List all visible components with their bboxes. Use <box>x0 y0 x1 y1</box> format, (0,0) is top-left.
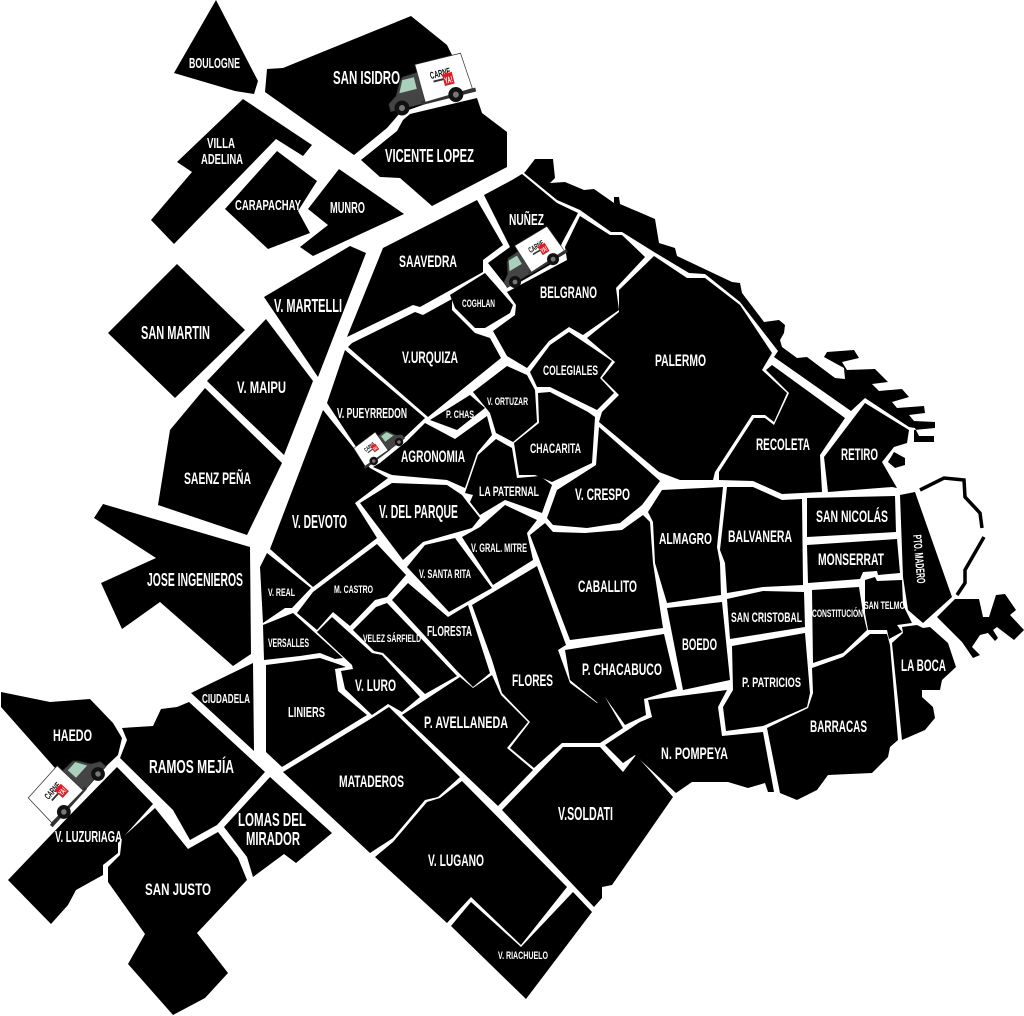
barrio: Nuñez: NUÑEZ <box>509 209 544 229</box>
barrio: N. Pompeya: N. POMPEYA <box>661 744 728 763</box>
barrio: Velez Sarsfield: VELEZ SÁRFIELD <box>363 632 421 645</box>
barrio: Floresta: FLORESTA <box>427 623 472 640</box>
icon: delivery truck Haedo <box>25 742 111 831</box>
barrio: Coghlan <box>450 273 513 328</box>
river outline <box>920 478 984 595</box>
barrio: Almagro <box>648 487 723 603</box>
barrio: V. Devoto <box>270 410 388 587</box>
barrio: V. Devoto: V. DEVOTO <box>292 512 347 532</box>
Retiro island <box>888 452 905 468</box>
barrio: Boulogne: BOULOGNE <box>189 55 240 72</box>
barrio: V. Santa Rita <box>407 538 492 612</box>
barrio: Recoleta: RECOLETA <box>756 435 810 454</box>
barrio: Liniers <box>266 658 367 767</box>
barrio: V. Pueyrredon: V. PUEYRREDON <box>337 405 407 422</box>
barrio: V. Crespo <box>547 427 660 528</box>
barrio: Velez Sarsfield <box>353 603 457 694</box>
barrio: San Isidro: SAN ISIDRO <box>333 68 400 88</box>
barrio: La Paternal <box>465 439 552 515</box>
barrio: Caballito <box>530 515 663 640</box>
barrio: Retiro: RETIRO <box>841 445 878 464</box>
barrio: P. Chacabuco: P. CHACABUCO <box>582 660 662 679</box>
barrio: V. Lugano <box>375 781 567 945</box>
barrio: Ciudadela <box>191 663 254 751</box>
barrio: Recoleta <box>719 365 845 494</box>
barrio: Villa Adelina: ADELINA <box>201 151 243 168</box>
barrio: Lomas del Mirador: LOMAS DEL <box>238 810 306 830</box>
barrio: Agronomia <box>373 416 492 488</box>
barrio: Caballito: CABALLITO <box>578 577 637 596</box>
barrio: P. Patricios: P. PATRICIOS <box>742 674 801 690</box>
barrio: Coghlan: COGHLAN <box>462 298 495 310</box>
barrio: San Cristobal: SAN CRISTOBAL <box>731 609 802 625</box>
barrio: Mataderos <box>283 707 460 853</box>
icon: delivery truck Nuñez: CARNE <box>527 238 546 255</box>
barrio: Floresta <box>392 583 490 687</box>
barrio: V. Gral. Mitre <box>462 505 537 585</box>
barrio: M. Castro <box>297 544 406 630</box>
barrio: Saenz Peña: SAENZ PEÑA <box>184 468 251 488</box>
barrio: Nuñez <box>484 174 578 287</box>
barrio: V. Luzuriaga: V. LUZURIAGA <box>55 829 122 846</box>
barrio: San Martin <box>108 264 245 398</box>
icon: delivery truck San Isidro <box>381 52 478 118</box>
barrio: V. Luro <box>317 617 420 715</box>
barrio: Mataderos: MATADEROS <box>339 772 404 791</box>
barrio: Ciudadela: CIUDADELA <box>202 691 250 706</box>
barrio: Boulogne <box>174 0 258 94</box>
barrio: P. Avellaneda: P. AVELLANEDA <box>424 713 508 732</box>
barrio: V. Luzuriaga <box>8 767 153 924</box>
barrio: San Telmo <box>864 577 912 639</box>
barrio: San Cristobal <box>727 591 805 639</box>
barrio: Vicente Lopez <box>361 98 507 206</box>
barrio: V. Pueyrredon <box>327 350 425 465</box>
icon: delivery truck Agronomia: CARNE <box>363 442 377 454</box>
barrio: P. Avellaneda <box>402 675 533 806</box>
barrio: Villa Adelina: VILLA <box>207 135 235 152</box>
barrio: Constitucion <box>812 587 867 663</box>
barrio: Palermo <box>587 256 787 480</box>
barrio: Colegiales: COLEGIALES <box>543 362 598 378</box>
barrio: V. Crespo: V. CRESPO <box>575 485 630 504</box>
barrio: La Boca <box>892 625 956 740</box>
barrio: Haedo: HAEDO <box>53 726 92 745</box>
barrio: Villa Adelina <box>151 99 312 244</box>
barrio: V. Gral. Mitre: V. GRAL. MITRE <box>471 541 527 555</box>
barrio: Agronomia: AGRONOMIA <box>401 447 465 466</box>
barrio: V. del Parque: V. DEL PARQUE <box>379 502 458 522</box>
barrio: P. Chas <box>430 395 485 430</box>
barrio: Belgrano: BELGRANO <box>540 283 597 302</box>
barrio: P. Patricios <box>723 633 810 731</box>
barrio: Colegiales <box>530 332 614 410</box>
barrio: Puerto Madero <box>900 492 952 623</box>
icon: delivery truck San Isidro: CARNE <box>429 66 452 82</box>
barrio: Saavedra: SAAVEDRA <box>399 252 457 271</box>
barrio: Almagro: ALMAGRO <box>659 531 712 548</box>
barrio: Vicente Lopez: VICENTE LOPEZ <box>385 146 474 166</box>
barrio: Chacarita: CHACARITA <box>530 440 581 456</box>
barrio: Retiro <box>824 403 909 492</box>
barrio: Haedo <box>1 692 122 790</box>
barrio: Constitucion: CONSTITUCIÓN <box>812 607 863 620</box>
barrio: V. Real <box>260 553 311 623</box>
barrio: Chacarita <box>514 392 595 482</box>
barrio: Palermo: PALERMO <box>655 351 706 370</box>
barrio: V. Maipu: V. MAIPU <box>237 378 286 397</box>
barrio: Jose Ingenieros <box>94 504 251 666</box>
La Boca port <box>937 594 1024 658</box>
barrio: Belgrano <box>493 216 645 368</box>
icon: delivery truck Nuñez <box>491 224 570 292</box>
barrio: Puerto Madero: PTO. MADERO <box>910 534 928 584</box>
barrio: Monserrat: MONSERRAT <box>818 550 884 569</box>
barrio: V. Ortuzar <box>473 366 537 442</box>
barrio: Carapachay: CARAPACHAY <box>235 197 301 214</box>
barrio: V. Martelli: V. MARTELLI <box>274 296 342 316</box>
barrio: San Telmo: SAN TELMO <box>864 600 905 612</box>
barrio: Liniers: LINIERS <box>288 704 325 721</box>
barrio: Munro: MUNRO <box>330 200 365 217</box>
icon: delivery truck San Isidro: YA! <box>443 74 454 86</box>
barrio: Ramos Mejia <box>120 702 265 840</box>
barrio: San Justo: SAN JUSTO <box>145 880 211 899</box>
barrio: Lomas del Mirador <box>224 777 332 877</box>
barrio: Monserrat <box>807 539 900 583</box>
barrio: V. Martelli <box>264 246 366 377</box>
icon: delivery truck Agronomia: YA! <box>372 445 379 453</box>
barrio: Munro <box>300 169 404 256</box>
barrio: P. Chacabuco <box>565 634 677 725</box>
barrio: P. Chas: P. CHAS <box>446 409 474 421</box>
barrio: Balvanera <box>720 487 803 593</box>
barrio: V. Soldati <box>502 747 673 907</box>
barrio: N. Pompeya <box>605 690 774 793</box>
barrio: V. Urquiza: V.URQUIZA <box>402 348 458 367</box>
barrio: Versalles: VERSALLES <box>268 636 309 650</box>
barrio: Barracas <box>767 634 898 800</box>
barrio: V. del Parque <box>360 483 480 560</box>
barrio: V. Real: V. REAL <box>268 587 295 599</box>
barrio: V. Lugano: V. LUGANO <box>428 851 484 870</box>
barrio: San Martin: SAN MARTIN <box>141 323 210 343</box>
barrio: V. Soldati: V.SOLDATI <box>558 804 613 824</box>
barrio: San Nicolas: SAN NICOLÁS <box>816 507 888 526</box>
barrio: Boedo: BOEDO <box>682 635 717 654</box>
barrio: Flores <box>472 566 623 768</box>
barrio: Boedo <box>667 602 730 690</box>
barrio: V. Luro: V. LURO <box>355 676 396 695</box>
barrio: V. Urquiza <box>348 299 501 417</box>
barrio: Barracas: BARRACAS <box>810 717 867 736</box>
barrio: San Nicolas <box>807 496 896 537</box>
barrio: M. Castro: M. CASTRO <box>334 584 373 596</box>
barrio: Jose Ingenieros: JOSE INGENIEROS <box>147 570 243 590</box>
barrio: V. Maipu <box>207 319 313 455</box>
barrio: La Paternal: LA PATERNAL <box>479 483 539 499</box>
icon: delivery truck Haedo: CARNE <box>43 780 63 801</box>
barrio: V. Ortuzar: V. ORTUZAR <box>487 396 528 408</box>
barrio: Saavedra <box>347 200 503 337</box>
barrio: Versalles <box>263 613 343 660</box>
barrio: San Justo <box>108 808 247 1015</box>
barrio: V. Santa Rita: V. SANTA RITA <box>419 567 471 581</box>
barrio: San Isidro <box>265 16 465 155</box>
icon: delivery truck Agronomia <box>351 420 407 471</box>
barrio: Flores: FLORES <box>512 671 553 690</box>
barrio: V. Riachuelo: V. RIACHUELO <box>498 950 548 962</box>
barrio: Saenz Peña <box>158 388 282 535</box>
barrio: Balvanera: BALVANERA <box>728 527 792 546</box>
icon: delivery truck Nuñez: YA! <box>539 244 549 255</box>
icon: delivery truck Haedo: YA! <box>57 786 68 797</box>
coastal strip and docks <box>524 159 935 442</box>
barrio: V. Riachuelo <box>451 892 592 999</box>
barrio: Carapachay <box>225 151 317 249</box>
barrio: Ramos Mejia: RAMOS MEJÍA <box>149 756 234 777</box>
barrio: Lomas del Mirador: MIRADOR <box>246 829 300 849</box>
barrio: La Boca: LA BOCA <box>901 656 946 675</box>
